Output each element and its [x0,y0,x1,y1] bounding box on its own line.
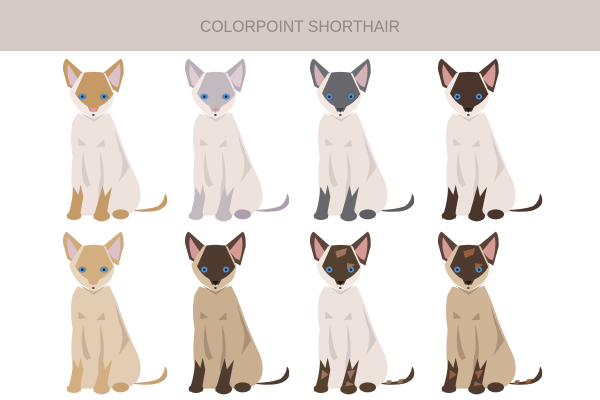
cat: seal on tan [185,232,289,394]
cat: cream point [63,232,167,394]
cat: lilac point [185,59,289,221]
title banner [0,0,600,51]
cat: seal point [438,59,542,221]
cat: tortie on tan [438,232,542,394]
cat: flame point [63,59,167,221]
cat: tortie point [310,232,414,394]
cat: blue point [310,59,414,221]
title: COLORPOINT SHORTHAIR [200,18,400,36]
